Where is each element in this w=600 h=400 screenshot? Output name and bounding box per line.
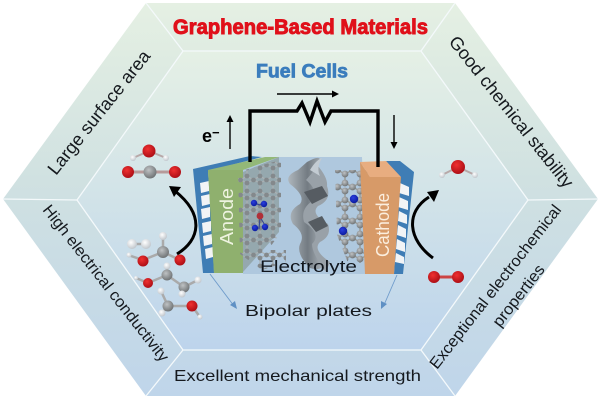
arrow: current direction [277, 90, 339, 98]
arrow: electron down [390, 115, 398, 149]
arrow: cathode reaction [413, 190, 439, 258]
anode bipolar plate [193, 156, 262, 273]
title: Graphene-Based Materials [173, 16, 428, 39]
anode graphene sheet [238, 157, 286, 272]
label: bipolar plates: Bipolar plates [245, 303, 372, 320]
label: electron: − [212, 125, 220, 140]
fuel cell diagram [193, 156, 414, 276]
label: large surface area: Large surface area [43, 46, 155, 178]
molecule: water anode side [130, 144, 169, 161]
molecule: ethanol [134, 262, 202, 298]
label: good chemical stability: Good chemical stability [445, 32, 578, 192]
arrow: bipolar plate left pointer [210, 274, 237, 309]
arrow: anode reaction [169, 186, 196, 254]
anode [208, 157, 279, 273]
label: exceptional electrochemical properties: properties [490, 262, 549, 330]
heading: fuel cells: Fuel Cells [256, 60, 348, 82]
label: excellent mechanical strength: Excellent mechanical strength [174, 368, 421, 385]
arrow: electron up [226, 115, 234, 149]
cathode graphene sheet [335, 170, 378, 263]
cathode [360, 161, 401, 274]
molecule: carbon dioxide [122, 166, 181, 178]
label: exceptional electrochemical properties: Exceptional electrochemical [427, 202, 565, 372]
cathode: Cathode [373, 193, 393, 257]
molecule: water cathode side [439, 160, 478, 178]
label: high electrical conductivity: High electrical conductivity [39, 202, 172, 365]
cathode bipolar plate [386, 161, 414, 274]
electrolyte membrane [288, 158, 330, 272]
molecule: oxygen [428, 271, 464, 283]
label: electrolyte: Electrolyte [260, 257, 357, 276]
anode: Anode [217, 188, 237, 245]
external circuit [250, 101, 378, 167]
electrolyte chamber [243, 157, 367, 274]
label: electron: e [202, 126, 212, 146]
molecule: formic acid and hydrogen [126, 232, 186, 266]
molecule: methanol [158, 288, 202, 320]
arrow: bipolar plate right pointer [381, 275, 397, 309]
